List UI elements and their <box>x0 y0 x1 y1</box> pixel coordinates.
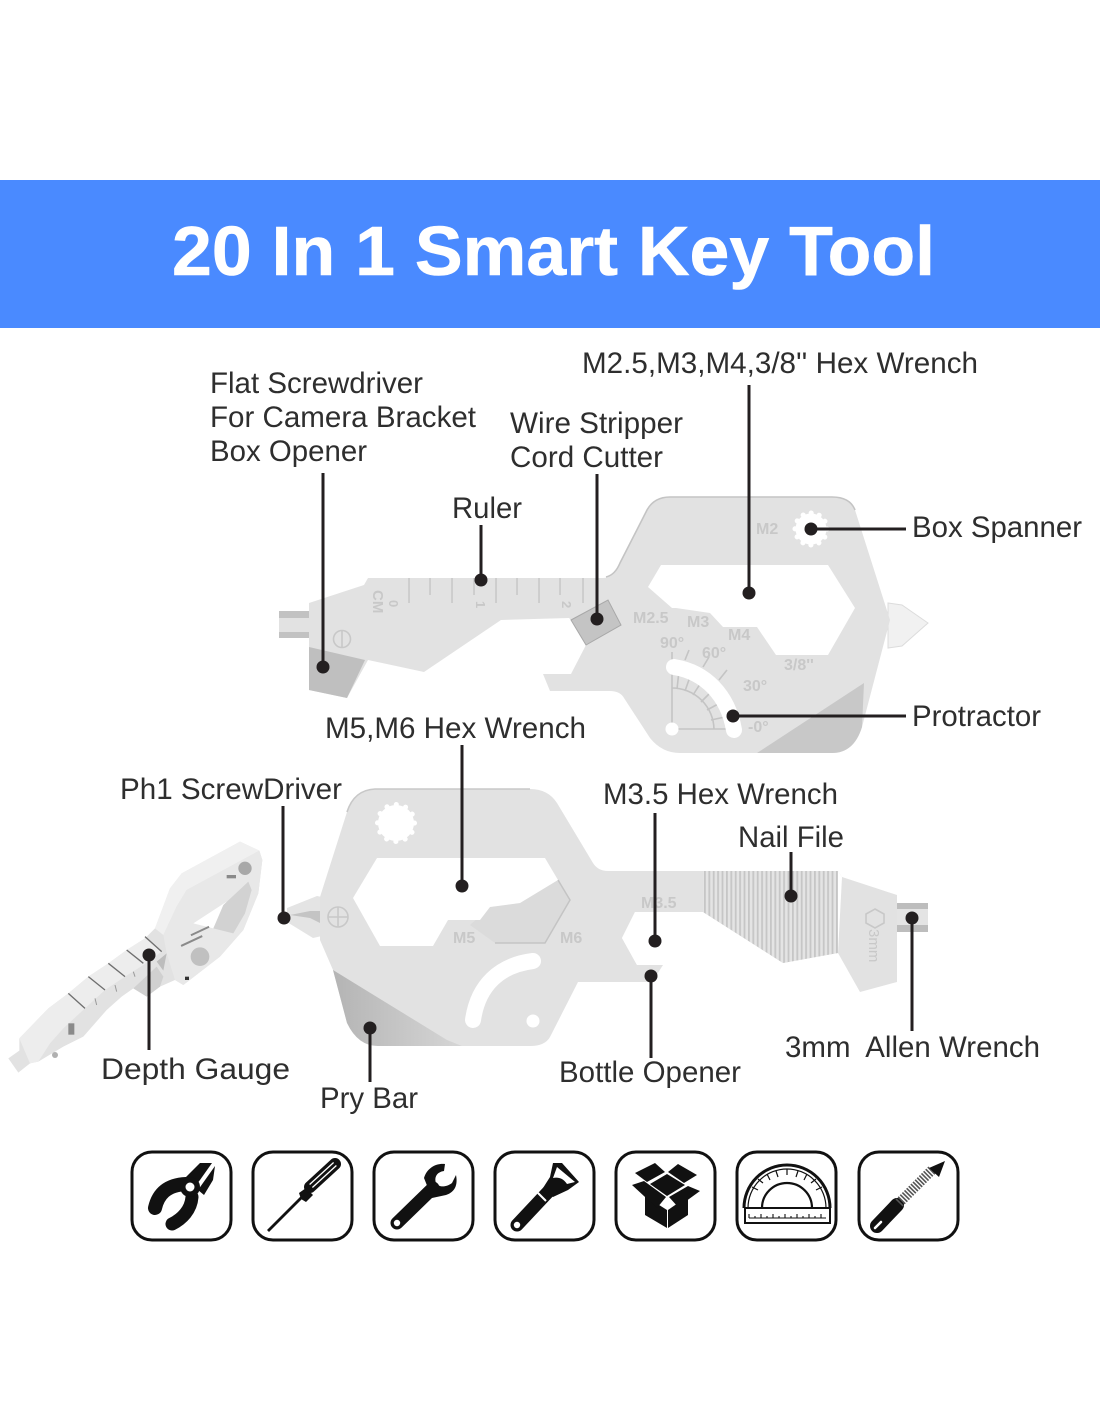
icon: protractor <box>737 1152 836 1240</box>
label: allen wrench: 3mm Allen Wrench <box>785 1031 1040 1064</box>
protractor slot <box>674 667 734 730</box>
phillips tip <box>287 896 322 938</box>
pry shade <box>333 970 462 1046</box>
box spanner hole <box>795 513 827 545</box>
label: wire stripper: Cord Cutter <box>510 441 663 474</box>
icon: pliers <box>132 1152 231 1240</box>
label: ph1 screwdriver: Ph1 ScrewDriver <box>120 773 342 806</box>
label: m3.5 hex wrench: M3.5 Hex Wrench <box>603 778 838 811</box>
label: flat screwdriver: Box Opener <box>210 435 367 468</box>
icon: nail file <box>859 1152 958 1240</box>
protractor scale <box>672 650 730 729</box>
allen tip <box>279 611 310 638</box>
pry shade <box>757 683 864 753</box>
flat blade shade <box>309 647 365 698</box>
flat mark <box>334 630 350 648</box>
icon: screwdriver <box>253 1152 352 1240</box>
phillips tip <box>888 603 928 648</box>
isometric side view <box>8 842 262 1073</box>
key body <box>320 789 897 1046</box>
icon: wrench <box>374 1152 473 1240</box>
bottle opener hole <box>622 912 663 965</box>
key body <box>309 497 890 753</box>
ruler ticks <box>409 578 583 603</box>
engraved sizes <box>453 895 882 962</box>
engraved sizes: M4 <box>728 627 750 644</box>
engraved sizes: M3 <box>687 614 709 631</box>
title banner: 20 In 1 Smart Key Tool <box>172 212 935 290</box>
engraved sizes: M2.5 <box>633 610 669 627</box>
label: protractor: Protractor <box>912 700 1041 733</box>
engraved sizes: 2 <box>559 601 574 608</box>
gap before end <box>838 871 842 953</box>
engraved sizes <box>369 521 814 736</box>
label: wire stripper: Wire Stripper <box>510 407 683 440</box>
label: flat screwdriver: Flat Screwdriver <box>210 367 423 400</box>
hex mark <box>866 909 884 928</box>
icon: bottle opener <box>495 1152 594 1240</box>
phillips mark <box>328 907 348 927</box>
engraved sizes: M6 <box>560 930 582 947</box>
engraved sizes: 3mm <box>865 929 882 962</box>
top key tool <box>279 497 928 753</box>
label: bottle opener: Bottle Opener <box>559 1056 741 1089</box>
title banner <box>0 180 1100 328</box>
engraved sizes: 0 <box>386 600 401 607</box>
engraved sizes: -0° <box>748 719 769 736</box>
leader lines and dots <box>142 385 918 1082</box>
hex hole <box>353 858 558 946</box>
label: flat screwdriver: For Camera Bracket <box>210 401 477 434</box>
engraved sizes: M5 <box>453 930 475 947</box>
label: wire stripper <box>510 407 683 474</box>
engraved sizes: M2 <box>756 521 778 538</box>
allen tip <box>897 903 928 932</box>
icon: open box <box>616 1152 715 1240</box>
gear hole <box>378 804 414 842</box>
label: nail file: Nail File <box>738 821 844 854</box>
label: ruler: Ruler <box>452 492 522 525</box>
wire stripper notch <box>571 600 621 645</box>
engraved sizes: 30° <box>743 678 767 695</box>
engraved sizes: 1 <box>473 601 488 608</box>
bottom key tool <box>287 789 928 1046</box>
hex hole shelf <box>470 880 570 943</box>
label: flat screwdriver <box>210 367 477 468</box>
engraved sizes: M3.5 <box>641 895 677 912</box>
label: depth gauge: Depth Gauge <box>101 1053 290 1086</box>
arc slot <box>473 961 533 1020</box>
label: pry bar: Pry Bar <box>320 1082 418 1115</box>
hex hole <box>648 565 855 655</box>
nail file <box>703 871 838 963</box>
label: box spanner: Box Spanner <box>912 511 1082 544</box>
label: hex wrench sizes: M2.5,M3,M4,3/8'' Hex Wrench <box>582 347 978 380</box>
engraved sizes: 3/8'' <box>784 657 814 674</box>
engraved sizes: 60° <box>702 645 726 662</box>
engraved sizes: 90° <box>660 635 684 652</box>
engraved sizes: CM <box>369 590 386 613</box>
label: m5 m6 hex wrench: M5,M6 Hex Wrench <box>325 712 586 745</box>
